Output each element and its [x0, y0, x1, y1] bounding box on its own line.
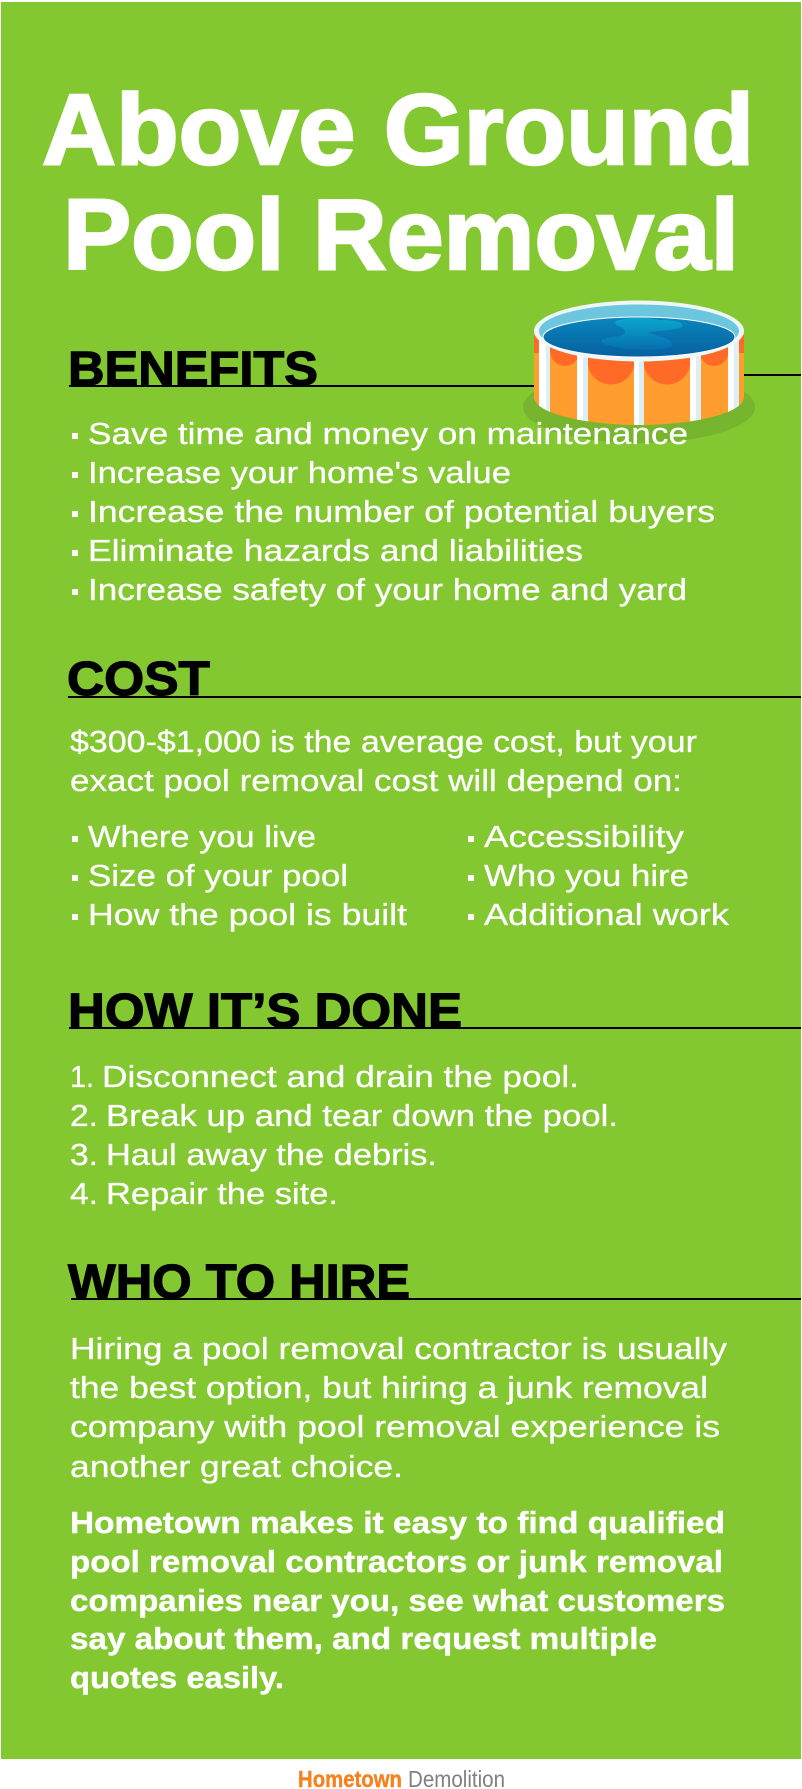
cost intro text [70, 724, 697, 798]
benefits list: Save time and money on maintenance [88, 416, 688, 451]
steps list: 3. [70, 1137, 98, 1172]
bold call to action: quotes easily. [70, 1660, 284, 1695]
icon: above ground pool [523, 300, 755, 443]
cost factors right column: Who you hire [484, 858, 689, 893]
cost factors right column: Additional work [484, 897, 730, 932]
panel: who to hire [68, 1256, 801, 1695]
title [42, 74, 754, 291]
cost factors left column: Where you live [88, 819, 316, 854]
hiring paragraph: company with pool removal experience is [70, 1409, 720, 1444]
cost factors left column [72, 819, 407, 932]
steps list [70, 1059, 618, 1211]
heading: how it's done: HOW IT’S DONE [68, 985, 462, 1038]
panel: cost [67, 653, 801, 932]
bold call to action: companies near you, see what customers [70, 1583, 725, 1618]
title: Pool Removal [63, 179, 739, 291]
heading: who to hire: WHO TO HIRE [68, 1256, 410, 1309]
cost intro text: exact pool removal cost will depend on: [70, 763, 682, 798]
heading: cost: COST [67, 653, 210, 706]
bold call to action: pool removal contractors or junk removal [70, 1544, 723, 1579]
bold call to action [70, 1505, 725, 1695]
steps list: Repair the site. [106, 1176, 338, 1211]
panel: how it's done [68, 985, 801, 1211]
panel: benefits [68, 300, 801, 607]
title: Above Ground [42, 74, 754, 186]
steps list: 1. [70, 1059, 94, 1094]
steps list: Disconnect and drain the pool. [102, 1059, 579, 1094]
bold call to action: Hometown makes it easy to find qualified [70, 1505, 725, 1540]
benefits list: Increase safety of your home and yard [88, 572, 687, 607]
cost intro text: $300-$1,000 is the average cost, but your [70, 724, 697, 759]
steps list: Break up and tear down the pool. [106, 1098, 618, 1133]
footer logo [298, 1766, 505, 1789]
cost factors right column [468, 819, 730, 932]
steps list: 4. [70, 1176, 98, 1211]
benefits list [72, 416, 715, 607]
benefits list: Eliminate hazards and liabilities [88, 533, 583, 568]
hiring paragraph: Hiring a pool removal contractor is usually [70, 1331, 728, 1366]
bold call to action: say about them, and request multiple [70, 1621, 657, 1656]
benefits list: Increase the number of potential buyers [88, 494, 715, 529]
benefits list: Increase your home's value [88, 455, 511, 490]
hiring paragraph: another great choice. [70, 1449, 403, 1484]
benefits rule [69, 374, 801, 387]
cost rule [68, 696, 801, 698]
heading: benefits: BENEFITS [68, 343, 318, 396]
cost factors left column: Size of your pool [88, 858, 348, 893]
cost factors right column: Accessibility [484, 819, 685, 854]
hiring paragraph: the best option, but hiring a junk removal [70, 1370, 708, 1405]
cost factors left column: How the pool is built [88, 897, 407, 932]
how rule [69, 1027, 801, 1029]
who rule [71, 1298, 801, 1300]
steps list: 2. [70, 1098, 98, 1133]
steps list: Haul away the debris. [106, 1137, 437, 1172]
hiring paragraph [70, 1331, 728, 1484]
